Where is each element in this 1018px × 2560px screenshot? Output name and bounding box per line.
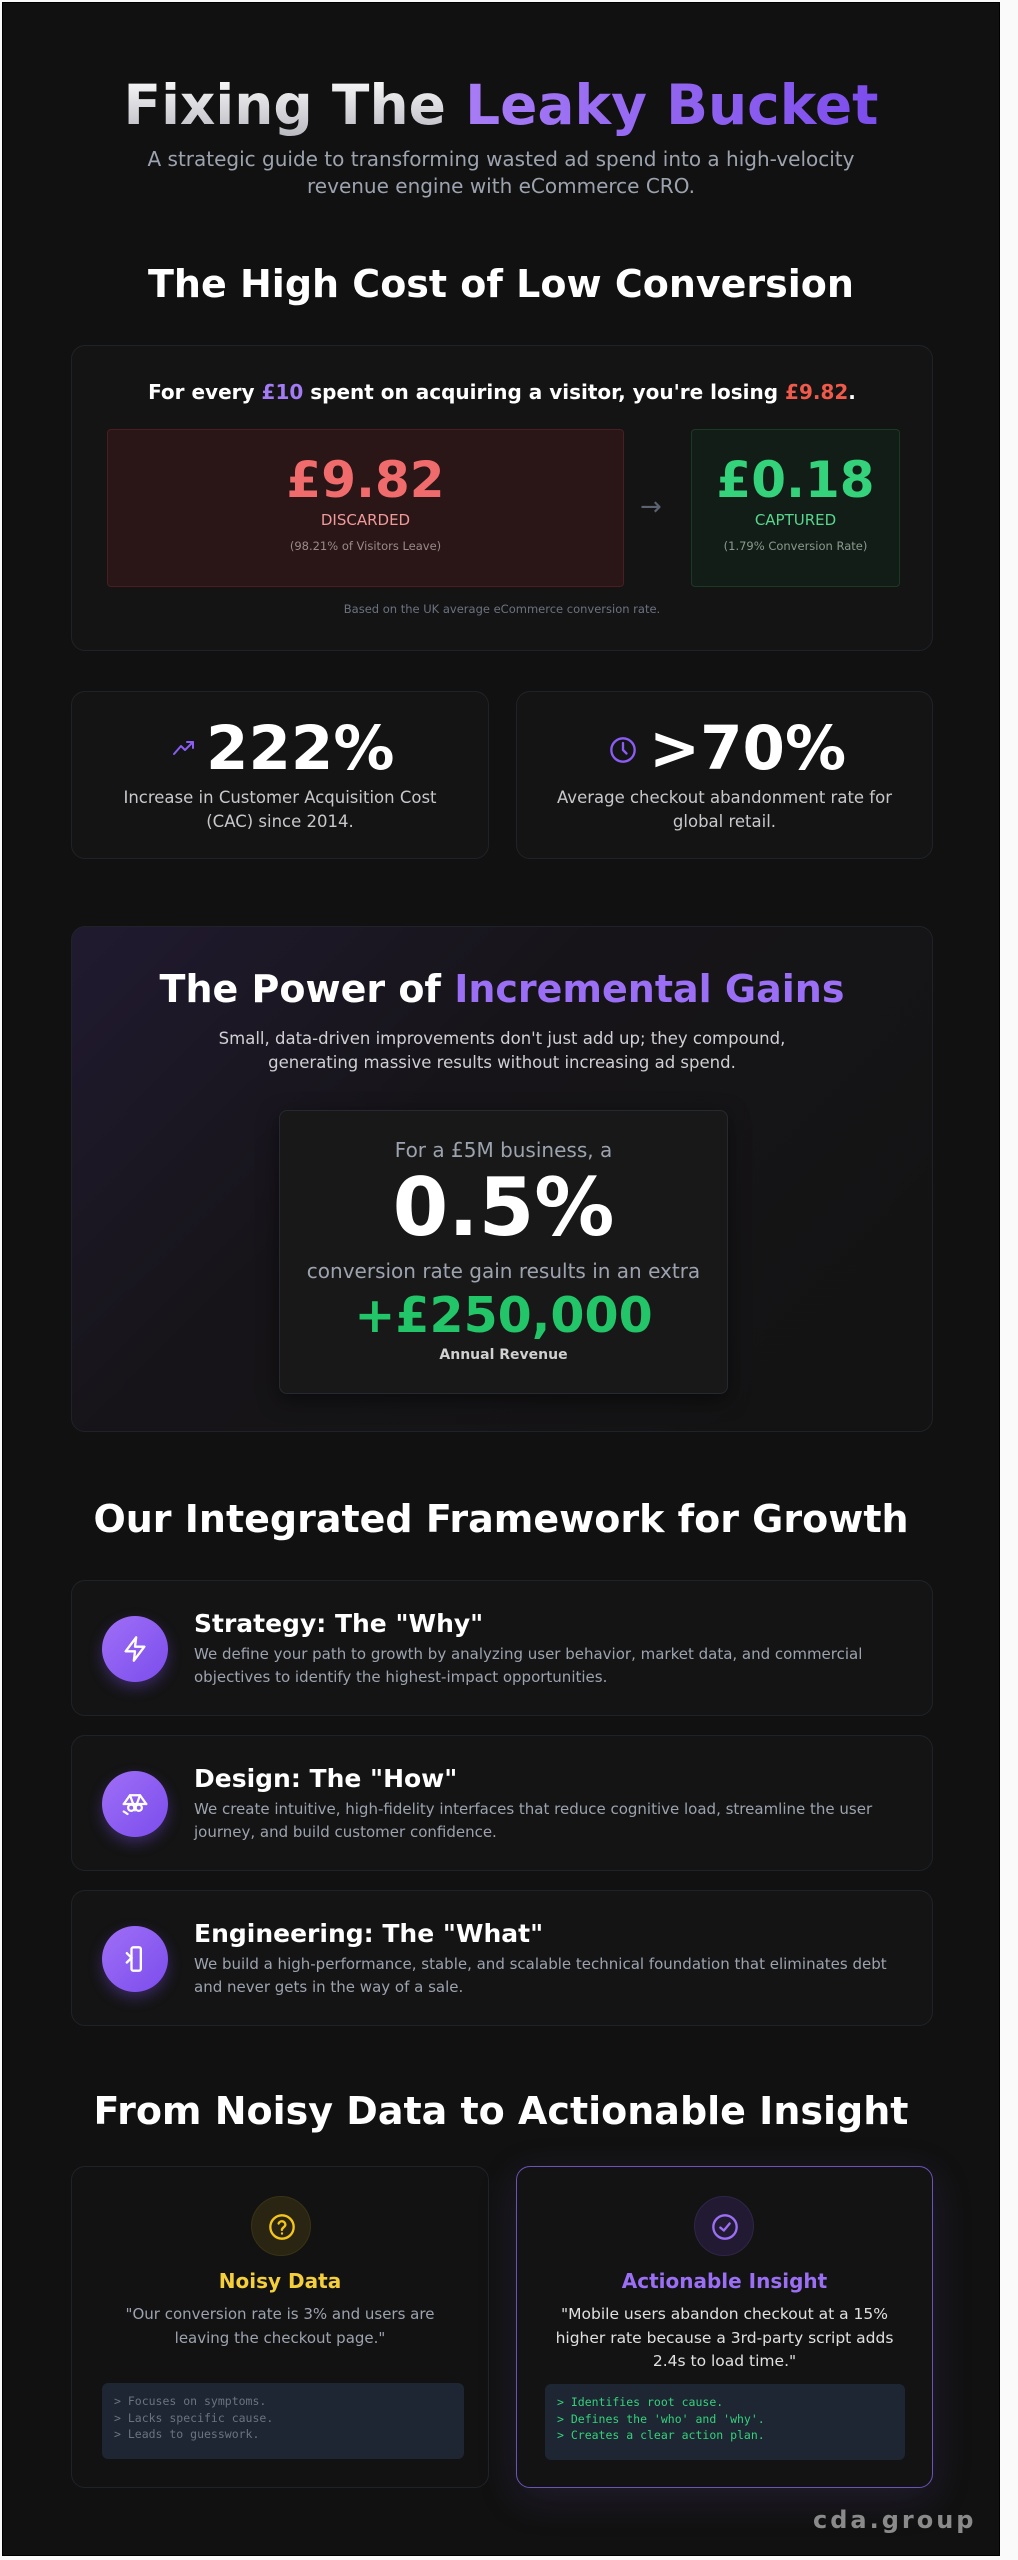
- subtitle: revenue engine with eCommerce CRO.: [307, 174, 695, 198]
- title: Strategy: The "Why": [194, 1609, 483, 1638]
- quote: "Mobile users abandon checkout at a 15% higher rate because a 3rd-party script adds 2.4s to load time.": [556, 2305, 893, 2370]
- code box: [545, 2384, 905, 2460]
- card: strategy: [71, 1580, 933, 1716]
- card: design: [71, 1735, 933, 1871]
- code box: [102, 2383, 464, 2459]
- stat card: abandonment: [516, 691, 933, 859]
- arrow: →: [640, 492, 662, 522]
- panel: incremental gains: [71, 926, 933, 1432]
- box: discarded: [107, 429, 624, 587]
- code box: > Defines the 'who' and 'why'.: [557, 2412, 765, 2426]
- icon: device: [102, 1926, 168, 1992]
- subtitle: [147, 147, 854, 198]
- text: Small, data-driven improvements don't just add up; they compound,: [219, 1029, 785, 1048]
- title: Engineering: The "What": [194, 1919, 543, 1948]
- callout box: Annual Revenue: [439, 1347, 568, 1363]
- footnote: Based on the UK average eCommerce conversion rate.: [344, 602, 660, 616]
- code box: > Identifies root cause.: [557, 2395, 723, 2409]
- box: discarded: DISCARDED: [321, 511, 410, 529]
- description: global retail.: [673, 812, 776, 831]
- title: Noisy Data: [219, 2269, 341, 2293]
- statement: For every £10 spent on acquiring a visitor, you're losing £9.82.: [148, 380, 856, 404]
- box: captured: CAPTURED: [755, 511, 836, 529]
- description: [557, 788, 892, 831]
- code box: > Focuses on symptoms.: [114, 2394, 266, 2408]
- callout box: [279, 1110, 728, 1394]
- number: 222%: [206, 713, 394, 784]
- box: captured: [691, 429, 900, 587]
- callout box: conversion rate gain results in an extra: [307, 1259, 700, 1283]
- code box: > Leads to guesswork.: [114, 2427, 259, 2441]
- code box: > Creates a clear action plan.: [557, 2428, 765, 2442]
- callout box: +£250,000: [354, 1287, 653, 1344]
- quote: "Our conversion rate is 3% and users are leaving the checkout page.": [126, 2305, 434, 2347]
- icon: clock: [610, 737, 636, 763]
- card: engineering: [71, 1890, 933, 2026]
- card: noisy data: [71, 2166, 489, 2488]
- heading: The Power of Incremental Gains: [160, 967, 844, 1011]
- stat card: CAC: [71, 691, 489, 859]
- panel: leaky cost: [71, 345, 933, 651]
- description: (CAC) since 2014.: [206, 812, 354, 831]
- heading: noisy to insight: From Noisy Data to Actionable Insight: [94, 2089, 908, 2133]
- icon: zap: [102, 1616, 168, 1682]
- heading: high cost: The High Cost of Low Conversion: [148, 262, 854, 306]
- description: Average checkout abandonment rate for: [557, 788, 892, 807]
- title: Fixing The Leaky Bucket: [124, 73, 878, 137]
- card: actionable insight: [516, 2166, 933, 2488]
- title: Actionable Insight: [622, 2269, 827, 2293]
- box: captured: (1.79% Conversion Rate): [724, 539, 867, 553]
- box: discarded: (98.21% of Visitors Leave): [290, 539, 441, 553]
- text: generating massive results without increasing ad spend.: [268, 1053, 736, 1072]
- icon: design: [102, 1771, 168, 1837]
- callout box: For a £5M business, a: [395, 1138, 612, 1162]
- icon: trending up: [173, 741, 194, 755]
- code box: > Lacks specific cause.: [114, 2411, 273, 2425]
- description: [123, 788, 437, 831]
- icon: check: [694, 2196, 754, 2256]
- callout box: 0.5%: [393, 1161, 614, 1254]
- box: discarded: £9.82: [286, 451, 445, 509]
- description: Increase in Customer Acquisition Cost: [123, 788, 437, 807]
- icon: question: [251, 2196, 311, 2256]
- title: Design: The "How": [194, 1764, 457, 1793]
- description: We define your path to growth by analyzing user behavior, market data, and commercial objectives to identify the highest-impact opportunities.: [194, 1645, 862, 1686]
- text: [219, 1029, 785, 1072]
- brand logo: cda.group: [813, 2506, 976, 2534]
- number: >70%: [649, 713, 846, 784]
- description: We build a high-performance, stable, and scalable technical foundation that eliminates debt and never gets in the way of a sale.: [194, 1955, 887, 1996]
- subtitle: A strategic guide to transforming wasted ad spend into a high-velocity: [147, 147, 854, 171]
- description: We create intuitive, high-fidelity interfaces that reduce cognitive load, streamline the user journey, and build customer confidence.: [194, 1800, 872, 1841]
- heading: framework: Our Integrated Framework for Growth: [93, 1497, 909, 1541]
- box: captured: £0.18: [716, 451, 875, 509]
